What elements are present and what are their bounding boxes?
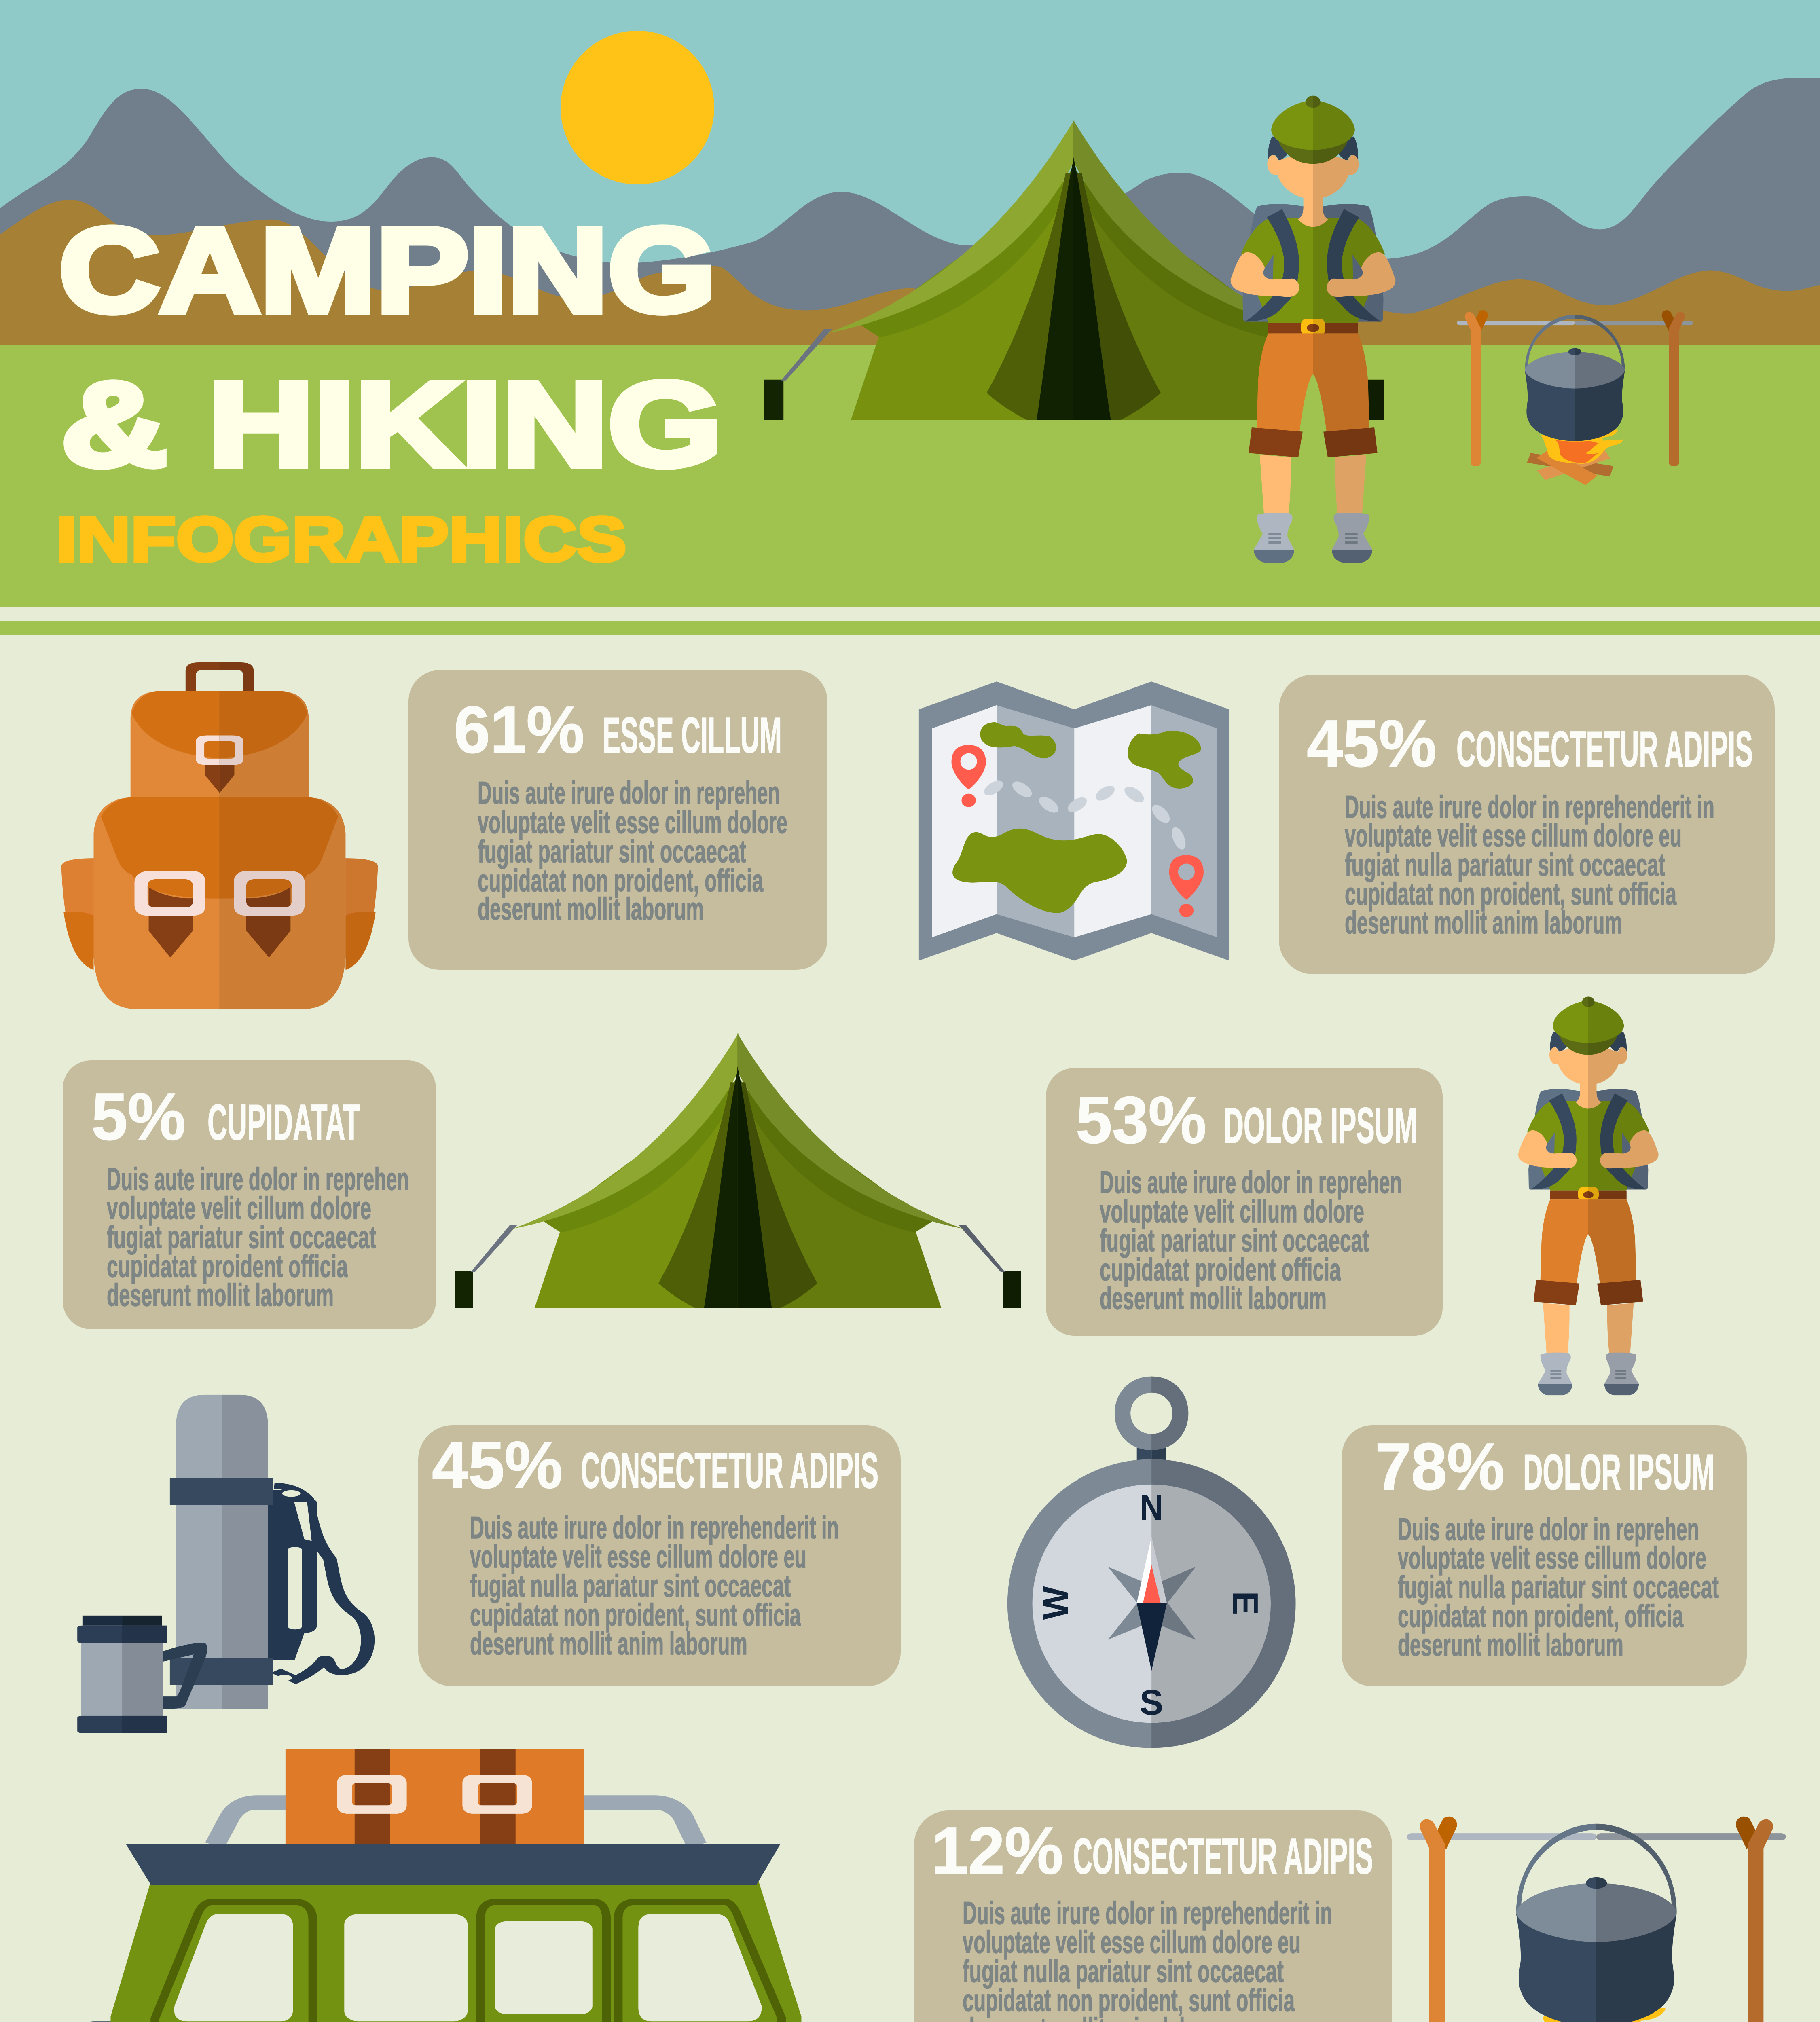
- heading: [454, 693, 782, 767]
- body text: voluptate velit esse cillum dolore: [478, 804, 787, 840]
- icon: thermos and cup: [77, 1395, 368, 1733]
- mountains: [0, 78, 1820, 351]
- sky: [0, 0, 1820, 364]
- body text: deserunt mollit laborum: [478, 891, 704, 926]
- body text: Duis aute irure dolor in reprehen: [107, 1161, 409, 1197]
- compass letter N: N: [1140, 1487, 1163, 1527]
- body text: deserunt mollit laborum: [1100, 1280, 1327, 1316]
- body text: Duis aute irure dolor in reprehenderit in: [470, 1510, 839, 1545]
- title: camping: CAMPING: [59, 203, 716, 337]
- compass letter S: S: [1140, 1682, 1163, 1722]
- heading: [931, 1814, 1373, 1888]
- body text: [1100, 1164, 1402, 1316]
- icon: tent: [455, 1033, 1021, 1308]
- body text: cupidatat proident officia: [1100, 1252, 1341, 1287]
- panel: 53% dolor ipsum: [1046, 1068, 1443, 1336]
- body text: deserunt mollit laborum: [1398, 1627, 1623, 1662]
- body text: fugiat pariatur sint occaecat: [478, 833, 746, 869]
- body text: voluptate velit esse cillum dolore eu: [963, 1924, 1301, 1960]
- heading: [1076, 1083, 1417, 1157]
- grass: [0, 345, 1820, 607]
- heading: 5%: [91, 1080, 186, 1154]
- icon: map: [919, 681, 1229, 960]
- icon: hiker: [1518, 997, 1659, 1395]
- heading: ESSE CILLUM: [603, 708, 782, 764]
- panel: 78% dolor ipsum: [1342, 1425, 1747, 1686]
- heading: 12%: [931, 1814, 1063, 1888]
- hero hiker: [1231, 96, 1395, 563]
- compass letter E: E: [1225, 1591, 1266, 1615]
- body text: [963, 1895, 1332, 2022]
- panel: 12% consectetur adipis: [914, 1810, 1392, 2022]
- body text: [107, 1161, 409, 1313]
- body text: fugiat nulla pariatur sint occaecat: [470, 1568, 791, 1603]
- sun: [561, 31, 714, 184]
- body text: fugiat pariatur sint occaecat: [107, 1219, 376, 1255]
- icon: backpack: [61, 662, 378, 1009]
- heading: 78%: [1375, 1430, 1505, 1504]
- panel: 45% consectetur adipis (middle): [418, 1425, 901, 1686]
- body text: Duis aute irure dolor in reprehenderit in: [963, 1895, 1332, 1931]
- heading: CONSECTETUR ADIPIS: [581, 1443, 878, 1499]
- hero cooking pot: [1457, 310, 1693, 485]
- hero scene background: [0, 0, 1820, 607]
- body text: voluptate velit cillum dolore: [1100, 1193, 1364, 1229]
- body text: [478, 775, 787, 926]
- heading: 61%: [454, 693, 584, 767]
- panel: 45% consectetur adipis (top): [1279, 675, 1775, 974]
- title: hiking: & HIKING: [61, 357, 722, 491]
- hero tent: [764, 120, 1384, 420]
- heading: DOLOR IPSUM: [1224, 1098, 1417, 1154]
- compass letter W: W: [1035, 1586, 1075, 1620]
- body text: voluptate velit esse cillum dolore eu: [470, 1539, 806, 1574]
- icon: cooking pot over campfire: [1407, 1817, 1786, 2022]
- heading: CUPIDATAT: [207, 1095, 360, 1151]
- icon: compass: [1007, 1377, 1296, 1748]
- heading: [1307, 706, 1753, 780]
- panel: 5% cupidatat: [63, 1060, 436, 1329]
- heading: CONSECTETUR ADIPIS: [1073, 1829, 1373, 1885]
- body text: [470, 1510, 839, 1661]
- body text: [1398, 1511, 1719, 1662]
- panel: 61% esse cillum: [408, 670, 827, 970]
- body text: voluptate velit cillum dolore: [107, 1190, 371, 1226]
- brown hills: [0, 200, 1820, 351]
- heading: [432, 1428, 878, 1502]
- body text: deserunt mollit anim laborum: [1345, 905, 1622, 940]
- body text: cupidatat non proident, sunt officia: [963, 1982, 1295, 2018]
- heading: 53%: [1076, 1083, 1206, 1157]
- body text: deserunt mollit laborum: [107, 1277, 334, 1313]
- body text: fugiat nulla pariatur sint occaecat: [963, 1953, 1284, 1989]
- body text: deserunt mollit anim laborum: [470, 1626, 747, 1661]
- body text: [1345, 789, 1714, 940]
- heading: [1375, 1430, 1714, 1504]
- body text: Duis aute irure dolor in reprehen: [478, 775, 780, 810]
- body text: cupidatat proident officia: [107, 1248, 348, 1284]
- divider band: [0, 607, 1820, 635]
- heading: 45%: [1307, 706, 1437, 780]
- heading: 45%: [432, 1428, 563, 1502]
- body text: fugiat pariatur sint occaecat: [1100, 1223, 1369, 1258]
- heading: [91, 1080, 360, 1154]
- body text: cupidatat non proident, officia: [478, 863, 763, 898]
- body text: cupidatat non proident, sunt officia: [470, 1597, 801, 1633]
- body text: Duis aute irure dolor in reprehen: [1100, 1164, 1402, 1200]
- icon: van with luggage: [74, 1749, 818, 2022]
- subtitle: INFOGRAPHICS: [56, 504, 626, 575]
